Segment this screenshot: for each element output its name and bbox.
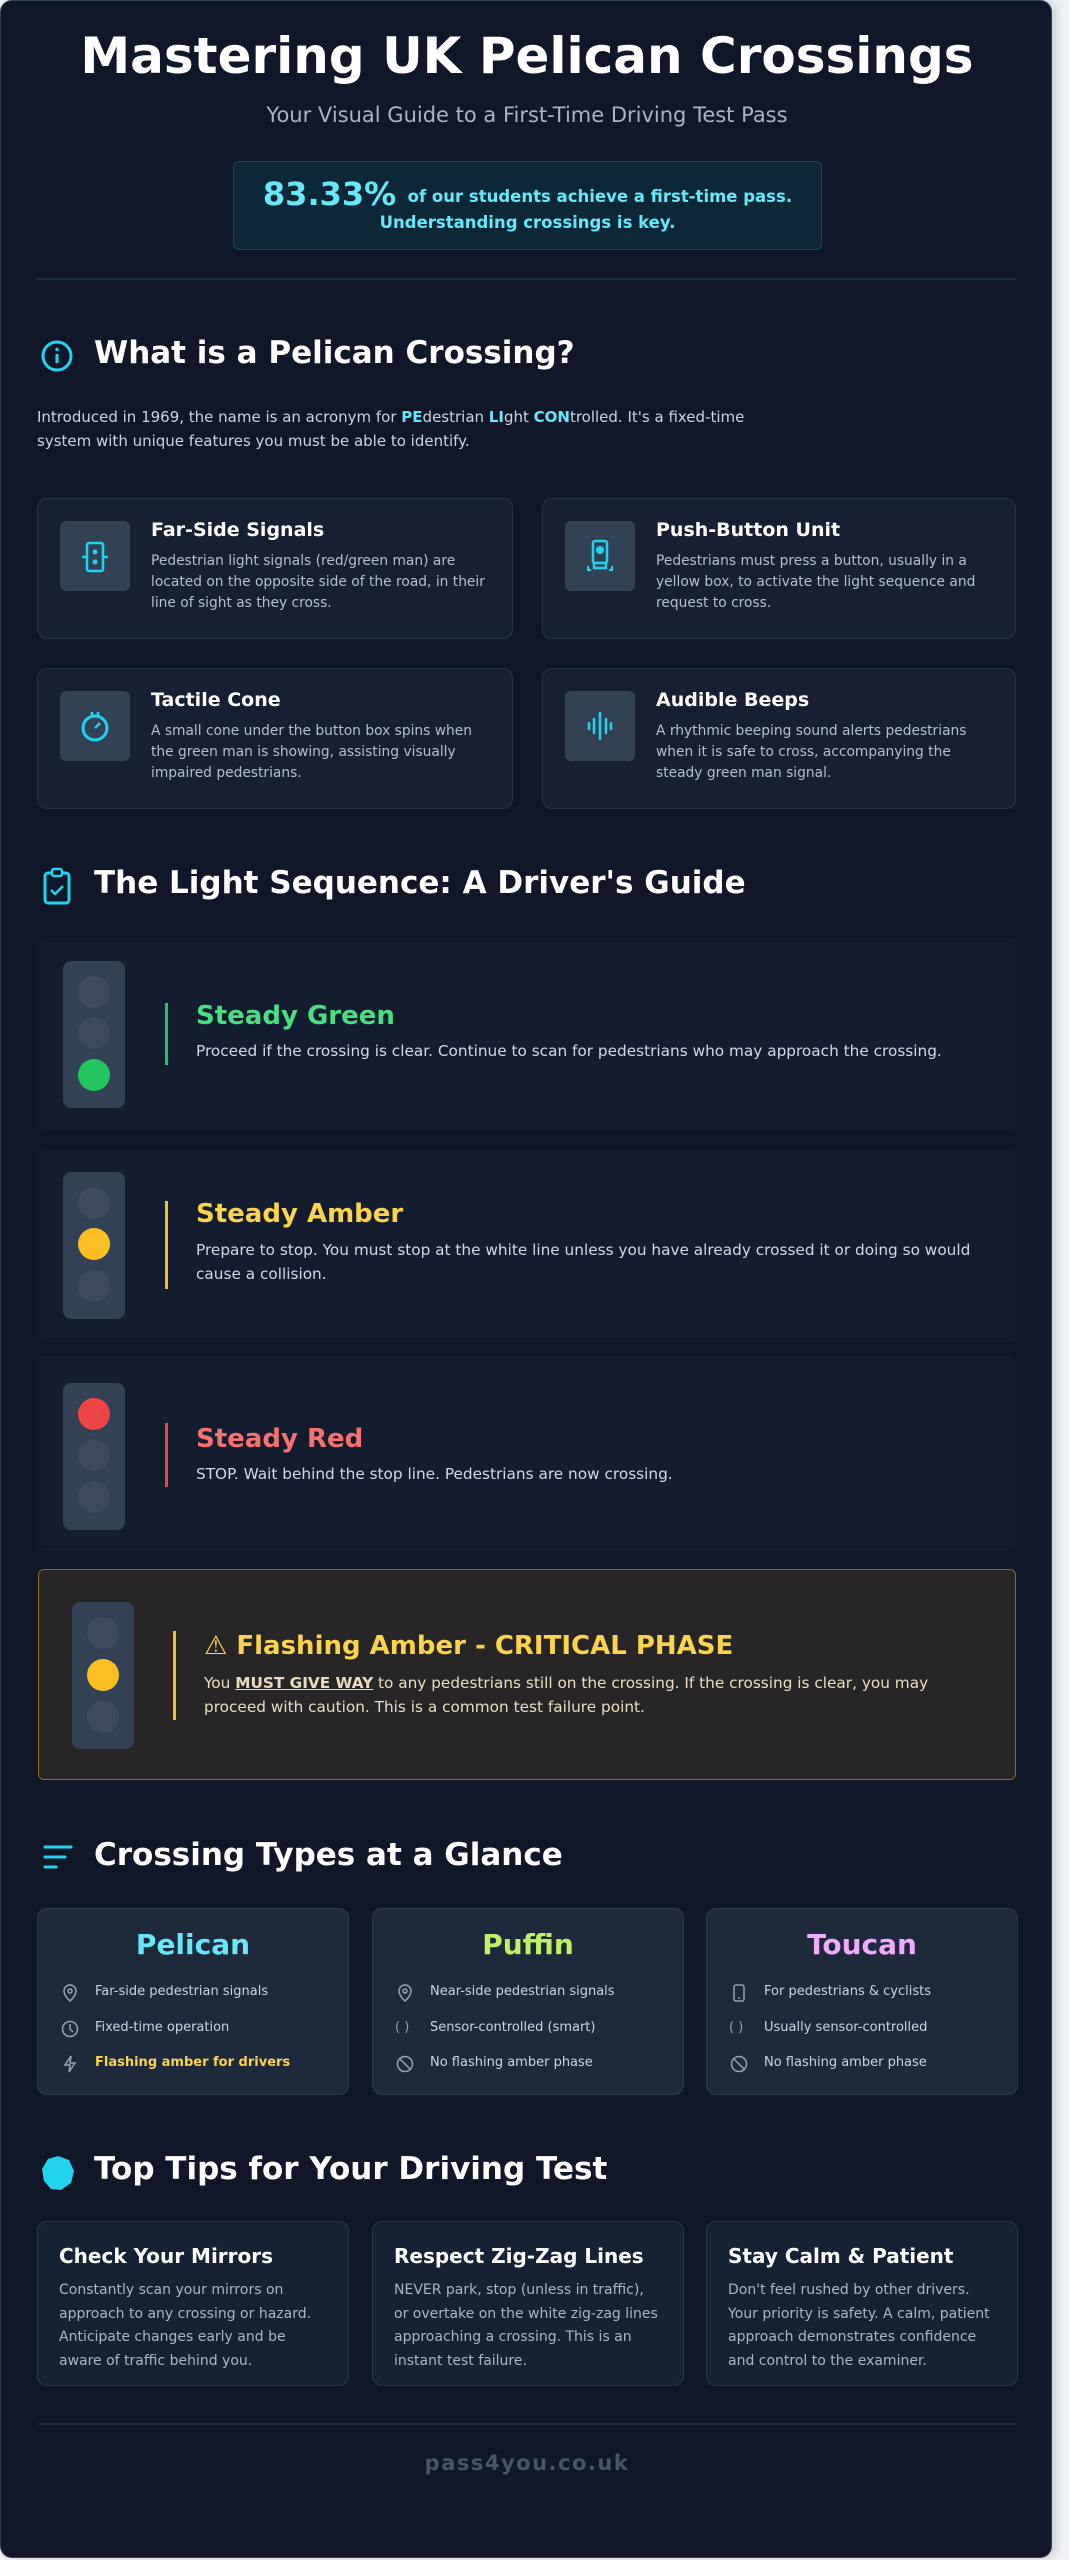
- heading: what is: What is a Pelican Crossing?: [94, 335, 575, 371]
- card: tactile cone: Tactile Cone: [151, 689, 281, 711]
- card: tactile cone: A small cone under the button box spins when the green man is showing, assisting visually impaired pedestrians.: [151, 723, 472, 781]
- panel: toucan: ( ): [729, 2020, 743, 2035]
- panel: steady green: [37, 938, 1016, 1131]
- card: audible beeps: Audible Beeps: [656, 689, 809, 711]
- tip: mirrors: Check Your Mirrors: [59, 2244, 273, 2268]
- heading: light sequence: The Light Sequence: A Driver's Guide: [94, 865, 746, 901]
- icon: traffic light red: [63, 1383, 125, 1530]
- panel: steady amber: [37, 1149, 1016, 1342]
- panel: steady amber: Prepare to stop. You must stop at the white line unless you have already crossed it or doing so would cause a collision.: [196, 1241, 970, 1283]
- panel: puffin: Puffin: [482, 1928, 574, 1961]
- panel: steady red: [37, 1356, 1016, 1551]
- heading: top tips: Top Tips for Your Driving Test: [94, 2151, 607, 2187]
- panel: toucan: Usually sensor-controlled: [764, 2020, 927, 2035]
- tip: zig-zag: NEVER park, stop (unless in traffic), or overtake on the white zig-zag lines approaching a crossing. This is an instant test failure.: [394, 2282, 658, 2368]
- tip: mirrors: Constantly scan your mirrors on approach to any crossing or hazard. Anticipate changes early and be aware of traffic behind you.: [59, 2282, 311, 2368]
- intro text: Introduced in 1969, the name is an acronym for PEdestrian LIght CONtrolled. It's a fixed-time system with unique features you must be able to identify.: [37, 408, 744, 450]
- panel: toucan: No flashing amber phase: [764, 2055, 927, 2070]
- icon: info: [42, 340, 72, 372]
- stat callout: Understanding crossings is key.: [380, 213, 675, 232]
- panel: toucan: Toucan: [807, 1928, 917, 1961]
- panel: steady red: Steady Red: [196, 1424, 363, 1454]
- icon: sound wave: [565, 691, 635, 761]
- tip: zig-zag: Respect Zig-Zag Lines: [394, 2244, 644, 2268]
- panel: toucan: [706, 1908, 1018, 2095]
- icon: button: [565, 521, 635, 591]
- heading: crossing types: Crossing Types at a Glance: [94, 1837, 563, 1873]
- card: push-button: Push-Button Unit: [656, 519, 840, 541]
- icon: traffic light green: [63, 961, 125, 1108]
- panel: pelican: Far-side pedestrian signals: [95, 1984, 268, 1999]
- icon: clipboard: [44, 868, 70, 904]
- panel: flashing amber callout: You MUST GIVE WAY to any pedestrians still on the crossing. If the crossing is clear, you may proceed with caution. This is a common test failure point.: [204, 1674, 928, 1716]
- panel: flashing amber callout: [38, 1569, 1016, 1780]
- card: far-side signals: Far-Side Signals: [151, 519, 324, 541]
- tip: calm: Stay Calm & Patient: [728, 2244, 953, 2268]
- panel: steady green: Proceed if the crossing is clear. Continue to scan for pedestrians who may approach the crossing.: [196, 1042, 942, 1060]
- tip: zig-zag: [372, 2221, 684, 2386]
- tip: calm: Don't feel rushed by other drivers. Your priority is safety. A calm, patient approach demonstrates confidence and control to the examiner.: [728, 2282, 990, 2368]
- icon: timer: [60, 691, 130, 761]
- icon: signals: [60, 521, 130, 591]
- tip: calm: [706, 2221, 1018, 2386]
- panel: puffin: No flashing amber phase: [430, 2055, 593, 2070]
- panel: puffin: ( ): [395, 2020, 409, 2035]
- card: far-side signals: [37, 498, 513, 639]
- card: tactile cone: [37, 668, 513, 809]
- panel: pelican: [37, 1908, 349, 2095]
- panel: toucan: For pedestrians & cyclists: [764, 1984, 931, 1999]
- panel: steady green: Steady Green: [196, 1001, 395, 1031]
- panel: pelican: Pelican: [136, 1928, 250, 1961]
- panel: pelican: Flashing amber for drivers: [95, 2055, 290, 2070]
- icon: traffic light flashing: [72, 1602, 134, 1749]
- card: far-side signals: Pedestrian light signals (red/green man) are located on the opposite side of the road, in their line of sight as they cross.: [151, 553, 485, 611]
- panel: steady red: STOP. Wait behind the stop line. Pedestrians are now crossing.: [196, 1465, 673, 1483]
- stat callout: [233, 161, 822, 250]
- panel: puffin: [372, 1908, 684, 2095]
- critical title: ⚠ Flashing Amber - CRITICAL PHASE: [204, 1631, 733, 1661]
- card: audible beeps: [542, 668, 1016, 809]
- panel: puffin: Near-side pedestrian signals: [430, 1984, 615, 1999]
- title: Mastering UK Pelican Crossings: [80, 27, 974, 85]
- icon: traffic light amber: [63, 1172, 125, 1319]
- icon: lines: [44, 1846, 72, 1868]
- panel: puffin: Sensor-controlled (smart): [430, 2020, 595, 2035]
- footer: pass4you.co.uk: [425, 2451, 629, 2475]
- tip: mirrors: [37, 2221, 349, 2386]
- card: audible beeps: A rhythmic beeping sound alerts pedestrians when it is safe to cross, accompanying the steady green man signal.: [656, 723, 966, 781]
- panel: pelican: Fixed-time operation: [95, 2020, 229, 2035]
- subtitle: Your Visual Guide to a First-Time Driving Test Pass: [266, 103, 788, 127]
- card: push-button: [542, 498, 1016, 639]
- card: push-button: Pedestrians must press a button, usually in a yellow box, to activate the light sequence and request to cross.: [656, 553, 975, 611]
- icon: badge: [42, 2156, 74, 2190]
- panel: steady amber: Steady Amber: [196, 1199, 403, 1229]
- stat callout: 83.33% of our students achieve a first-time pass.: [263, 175, 792, 213]
